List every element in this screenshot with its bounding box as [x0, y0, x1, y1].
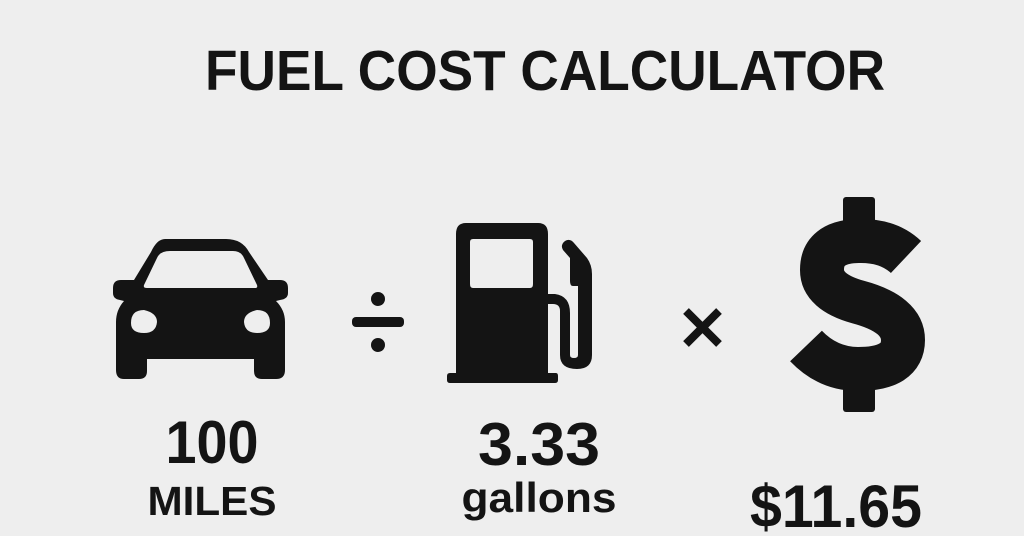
text: 3.33 gallons — [462, 411, 616, 521]
text: 100 miles: 100 — [166, 409, 258, 476]
text: 100 miles — [148, 409, 276, 524]
text: 3.33 gallons: 3.33 — [478, 411, 600, 478]
icon: times sign — [686, 311, 719, 344]
text: 100 miles: MILES — [148, 478, 276, 524]
icon: car — [113, 239, 288, 379]
title: FUEL COST CALCULATOR — [205, 39, 885, 103]
icon: divide sign — [352, 292, 404, 352]
text: 3.33 gallons: gallons — [462, 474, 616, 521]
icon: fuel pump — [447, 223, 592, 383]
icon: dollar sign — [806, 197, 906, 412]
